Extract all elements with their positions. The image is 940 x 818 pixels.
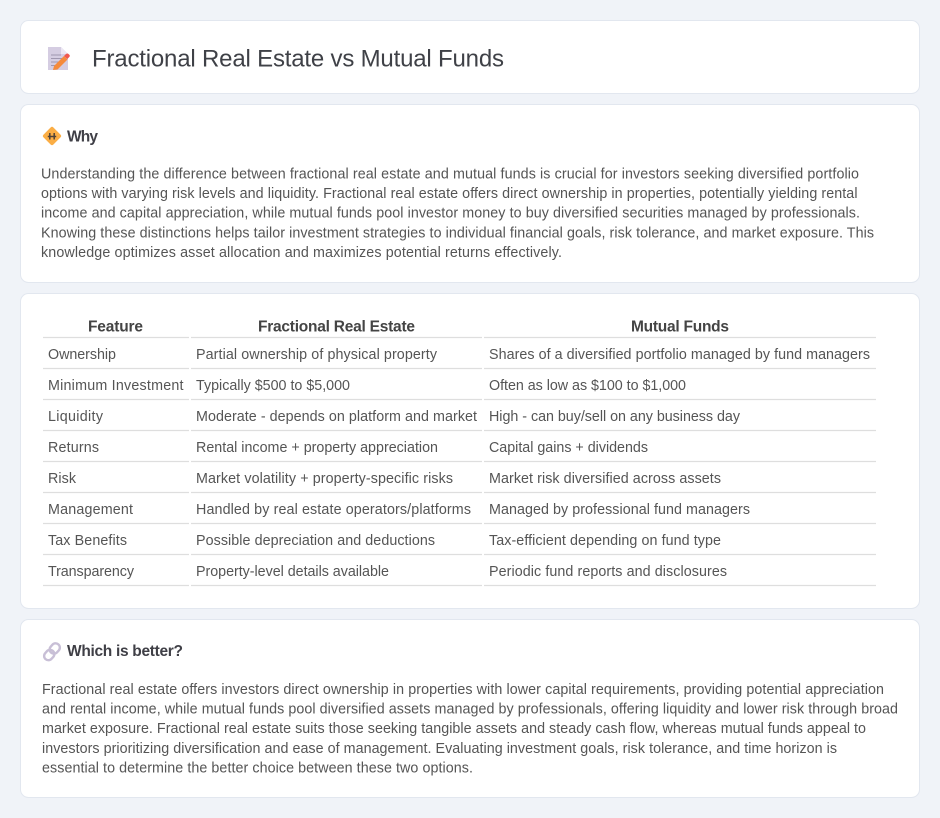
row: minimum investment: Often as low as $100 to $1,000	[489, 378, 686, 394]
row: management: Handled by real estate operators/platforms	[196, 502, 471, 518]
text block: which is better paragraph: market exposure. Fractional real estate suits those seeking tangible assets and steady cash flow, whereas mutual funds appeal to	[42, 721, 866, 737]
row: returns: Returns	[48, 440, 99, 456]
row: liquidity: Moderate - depends on platform and market	[196, 409, 477, 425]
row: minimum investment: Typically $500 to $5,000	[196, 378, 350, 394]
table header: Mutual Funds	[631, 318, 729, 336]
heading: which is better: Which is better?	[67, 643, 183, 660]
row: risk: Risk	[48, 471, 77, 487]
icon: warning diamond	[42, 126, 62, 146]
icon: link	[42, 642, 62, 662]
row: risk	[48, 471, 721, 487]
row: management: Managed by professional fund managers	[489, 502, 750, 518]
text block: which is better paragraph: Fractional real estate offers investors direct ownership in properties with lower capital requirements, providing potential appreciation	[42, 682, 884, 698]
row: returns: Rental income + property appreciation	[196, 440, 438, 456]
row: returns	[48, 440, 648, 456]
heading: why: Why	[67, 128, 98, 146]
row: management: Management	[48, 502, 133, 518]
text block: which is better paragraph: investors prioritizing diversification and ease of management. Evaluating investment goals, risk tolerance, and time horizon is	[42, 741, 837, 757]
text block: why paragraph: Knowing these distinctions helps tailor investment strategies to individual financial goals, risk tolerance, and market exposure. This	[41, 226, 874, 242]
panel: header	[20, 20, 920, 94]
row: transparency: Transparency	[48, 564, 135, 580]
text block: why paragraph: Understanding the difference between fractional real estate and mutual funds is crucial for investors seeking diversified portfolio	[41, 166, 859, 182]
row: ownership: Partial ownership of physical property	[196, 347, 438, 363]
table header: Fractional Real Estate	[258, 318, 415, 336]
text block: why paragraph: options with varying risk levels and liquidity. Fractional real estate offers direct ownership in properties, potentially yielding rental	[41, 186, 858, 202]
table header: Feature	[88, 318, 143, 336]
text block: which is better paragraph: essential to determine the better choice between these two options.	[42, 760, 473, 776]
title: Fractional Real Estate vs Mutual Funds	[92, 46, 504, 72]
row: minimum investment	[48, 378, 686, 394]
row: risk: Market risk diversified across assets	[489, 471, 721, 487]
row: minimum investment: Minimum Investment	[48, 378, 184, 394]
row: tax benefits: Tax-efficient depending on fund type	[489, 533, 721, 549]
text block: why paragraph: knowledge optimizes asset allocation and maximizes potential returns effectively.	[41, 245, 562, 261]
row: transparency: Property-level details available	[196, 564, 389, 580]
row: risk: Market volatility + property-specific risks	[196, 471, 453, 487]
row: returns: Capital gains + dividends	[489, 440, 648, 456]
row: tax benefits: Tax Benefits	[48, 533, 127, 549]
row: liquidity: High - can buy/sell on any business day	[489, 409, 741, 425]
row: ownership	[48, 347, 870, 363]
row: ownership: Shares of a diversified portfolio managed by fund managers	[489, 347, 870, 363]
text block: which is better paragraph	[42, 682, 898, 776]
icon: document with pencil	[48, 47, 70, 70]
row: tax benefits: Possible depreciation and deductions	[196, 533, 435, 549]
table header	[88, 318, 729, 336]
text block: why paragraph	[41, 166, 874, 261]
panel: comparison table	[20, 294, 920, 608]
row: liquidity	[48, 409, 741, 425]
row: transparency	[48, 564, 727, 580]
row: transparency: Periodic fund reports and disclosures	[489, 564, 727, 580]
panel: why	[20, 104, 920, 282]
row: tax benefits	[48, 533, 721, 549]
row: management	[48, 502, 750, 518]
panel: which is better	[20, 620, 920, 798]
row: ownership: Ownership	[48, 347, 116, 363]
row: liquidity: Liquidity	[48, 409, 104, 425]
text block: why paragraph: income and capital appreciation, while mutual funds pool investor money to buy diversified securities managed by professionals.	[41, 206, 860, 222]
text block: which is better paragraph: and rental income, while mutual funds pool diversified assets managed by professionals, offering liquidity and lower risk through broad	[42, 702, 898, 718]
